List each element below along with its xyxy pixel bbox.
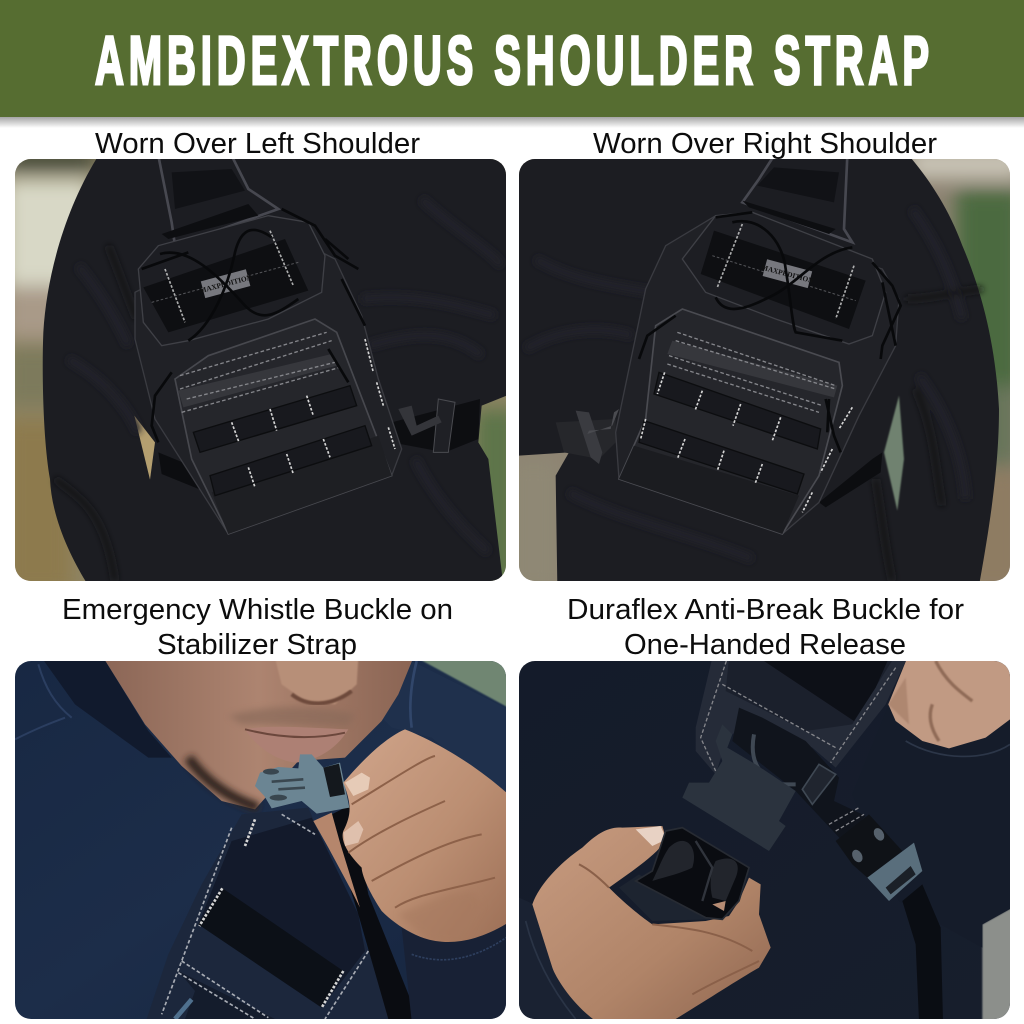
panel: whistle buckle photo [15,658,508,1021]
webbing through female buckle [619,874,709,921]
caption: emergency whistle buckle: Emergency Whistle Buckle on [62,594,453,626]
zipper band [178,354,337,407]
collar [42,658,172,758]
caption: worn over right shoulder: Worn Over Right Shoulder [593,128,937,160]
caption: emergency whistle buckle [62,594,453,661]
webbing and adjuster [732,708,866,841]
panel: left shoulder photo [5,149,518,592]
narrow webbing strap [332,804,418,1019]
bag strap [147,808,392,1019]
icon: hand on buckle [343,729,508,945]
stabilizer strap and hook [556,409,882,507]
icon: upper right hand [888,658,1012,748]
icon: female buckle [636,828,749,919]
icon: whistle buckle [255,754,349,814]
jacket cuff [402,923,508,1021]
molle webbing [654,372,821,449]
logo patch: MAXPEDITION [760,263,815,285]
top pouch [682,212,886,344]
velcro panel [143,239,308,332]
moustache shadow [228,707,355,726]
title: AMBIDEXTROUS SHOULDER STRAP [95,22,929,99]
person in black shirt [516,156,999,586]
thumbnails [345,773,370,796]
icon: hand holding buckle [532,826,771,1021]
finger creases [348,756,495,908]
nose [275,658,358,704]
shirt folds [54,245,368,574]
icon: male buckle [682,724,796,851]
bungee cords [716,212,852,341]
velcro panel [701,231,866,329]
header banner [0,0,1024,128]
background corner [982,908,1012,1021]
icon: tension-lock adjuster [836,814,922,901]
bag: sling pack mirrored [556,156,901,534]
jacket shoulder behind hand [382,661,508,801]
right sleeve [852,704,1012,948]
finger behind strap [313,813,360,908]
shoulder strap pad [696,658,907,774]
tan gap between arm and torso [134,416,155,480]
shirt folds [872,282,986,575]
shoulder strap [742,156,852,242]
background corner [421,661,506,708]
bag: sling pack [135,156,480,534]
lips [265,727,348,762]
caption: duraflex buckle: Duraflex Anti-Break Buckle for [567,594,964,626]
panel: duraflex buckle photo [519,658,1012,1021]
caption: emergency whistle buckle: Stabilizer Strap [157,629,357,661]
top pouch [138,216,325,346]
lower strap [902,884,943,1021]
zipper band [667,341,837,397]
main body [616,216,899,534]
shoulder strap [158,156,278,246]
front pouch [175,319,392,534]
person in black shirt [43,156,515,586]
zipper pulls [639,262,901,452]
left sleeve [519,898,599,1021]
face [103,658,413,809]
caption: worn over left shoulder: Worn Over Left Shoulder [95,128,420,160]
molle webbing [193,386,357,452]
bungee cords [142,230,298,341]
logo patch: MAXPEDITION [198,272,253,295]
front pouch [619,309,842,534]
zipper pulls [152,209,365,442]
chin beard [188,758,258,808]
stabilizer strap and hook [158,399,480,496]
caption: duraflex buckle: One-Handed Release [624,629,906,661]
caption: duraflex buckle [567,594,964,661]
panel: right shoulder photo [509,149,1022,592]
gap between arm and torso [884,396,904,511]
main body [135,226,402,534]
